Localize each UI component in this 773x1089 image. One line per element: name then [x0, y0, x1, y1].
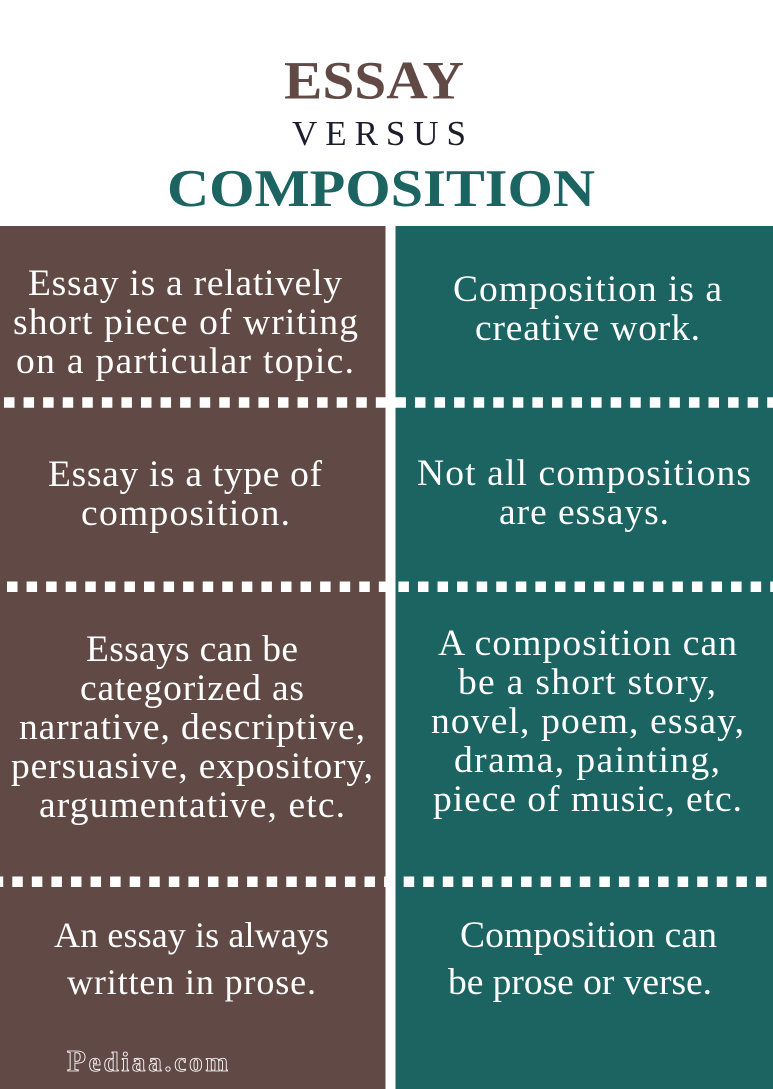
divider row 3	[0, 876, 773, 887]
text: essay categories: narrative, descriptive,	[19, 707, 365, 748]
text: composition prose or verse: be prose or verse.	[448, 962, 712, 1003]
text: composition scope: are essays.	[499, 492, 669, 533]
text: essay definition: Essay is a relatively	[28, 263, 342, 304]
text: composition prose or verse: Composition can	[460, 915, 717, 956]
panel: essay column background	[0, 226, 386, 1089]
panel: composition column background	[396, 226, 773, 1089]
text: essay in prose: written in prose.	[67, 962, 316, 1002]
text: essay categories	[11, 629, 373, 826]
text: essay type: composition.	[81, 493, 290, 534]
text: essay definition	[13, 263, 358, 382]
text: essay definition: short piece of writing	[13, 302, 358, 343]
text: composition forms: novel, poem, essay,	[431, 701, 744, 742]
text: composition prose or verse	[448, 915, 717, 1003]
text: composition forms	[431, 623, 744, 820]
text: essay categories: Essays can be	[86, 629, 298, 670]
text: essay type: Essay is a type of	[48, 454, 322, 495]
logo: Pediaa.com: Pediaa.com	[67, 1043, 228, 1078]
text: essay definition: on a particular topic.	[16, 341, 354, 382]
heading: essay: ESSAY	[284, 50, 464, 110]
text: composition definition: Composition is a	[453, 269, 722, 310]
title	[167, 50, 595, 218]
text: essay type	[48, 454, 322, 534]
text: essay categories: categorized as	[80, 668, 304, 709]
text: composition scope	[417, 453, 751, 533]
heading: versus: VERSUS	[292, 114, 466, 153]
text: composition forms: piece of music, etc.	[433, 779, 742, 820]
text: composition scope: Not all compositions	[417, 453, 751, 494]
text: essay in prose	[54, 915, 329, 1002]
text: composition definition: creative work.	[475, 308, 700, 349]
text: composition forms: A composition can	[438, 623, 737, 664]
text: composition forms: drama, painting,	[454, 740, 720, 781]
text: essay categories: persuasive, expository,	[11, 746, 373, 787]
divider row 2	[7, 581, 773, 592]
text: composition definition	[453, 269, 722, 349]
text: composition forms: be a short story,	[458, 662, 716, 703]
heading: composition: COMPOSITION	[167, 160, 595, 218]
text: essay categories: argumentative, etc.	[39, 785, 345, 826]
text: essay in prose: An essay is always	[54, 915, 329, 955]
divider row 1	[4, 397, 773, 408]
